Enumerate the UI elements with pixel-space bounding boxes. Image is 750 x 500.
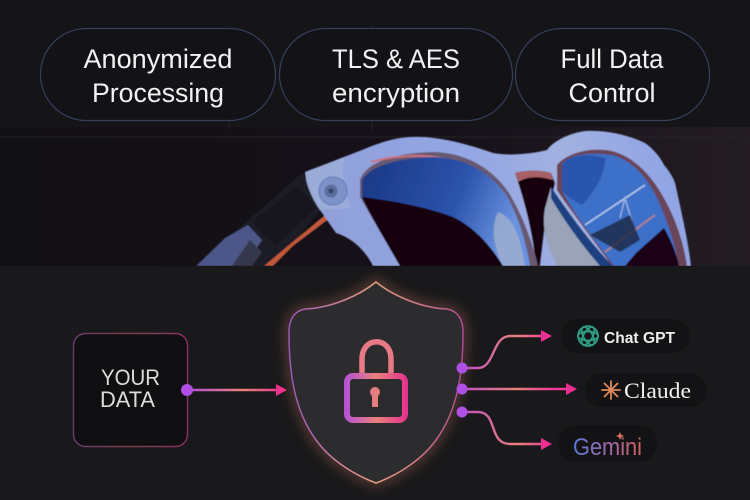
frame pale corner (305, 157, 352, 210)
temple arm (234, 174, 320, 266)
badge: Gemini: Gemini (573, 434, 642, 461)
badge: Gemini (558, 425, 657, 462)
arrow: shield to Claude (456, 383, 577, 395)
left lens (362, 157, 530, 266)
icon: Claude starburst (602, 381, 620, 399)
orange temple strip (264, 215, 334, 266)
shield body (289, 282, 463, 483)
feature pills (40, 28, 710, 120)
frame (305, 131, 691, 266)
bridge nose pad (542, 186, 600, 266)
pill: TLS and AES encryption (280, 28, 512, 120)
nose gap (515, 171, 555, 266)
arrow: data to shield (181, 384, 287, 396)
data box: your data (74, 334, 188, 446)
shield with lock (289, 282, 463, 483)
icon: sparkle (616, 432, 624, 440)
shield glow (289, 282, 463, 483)
pill: full data control (516, 28, 710, 120)
data box: your data: YOUR (101, 365, 160, 390)
arrow: shield to Gemini (456, 406, 552, 450)
left lens rim (360, 152, 538, 266)
badge: Chat GPT (561, 319, 690, 353)
pill: full data control: Full Data (560, 44, 664, 74)
glasses photo background (0, 127, 750, 266)
pill: TLS and AES encryption: encryption (332, 78, 460, 108)
pill: anonymized processing: Processing (92, 78, 224, 108)
right lens (562, 154, 679, 266)
badge: Chat GPT: Chat GPT (604, 330, 676, 347)
lower panel background (0, 266, 750, 500)
right lens rim (557, 150, 687, 266)
smart glasses illustration (196, 131, 691, 266)
pill: TLS and AES encryption: TLS & AES (332, 44, 460, 74)
badge: Claude: Claude (624, 378, 691, 403)
arrow: shield to Chat GPT (456, 330, 552, 374)
pill: anonymized processing (40, 28, 276, 120)
icon: OpenAI knot (578, 325, 598, 347)
pill: anonymized processing: Anonymized (84, 44, 232, 74)
badge: Claude (585, 373, 707, 407)
camera (319, 177, 347, 205)
data box: your data: DATA (100, 387, 155, 412)
pill: full data control: Control (568, 78, 656, 108)
lock icon (347, 342, 405, 420)
